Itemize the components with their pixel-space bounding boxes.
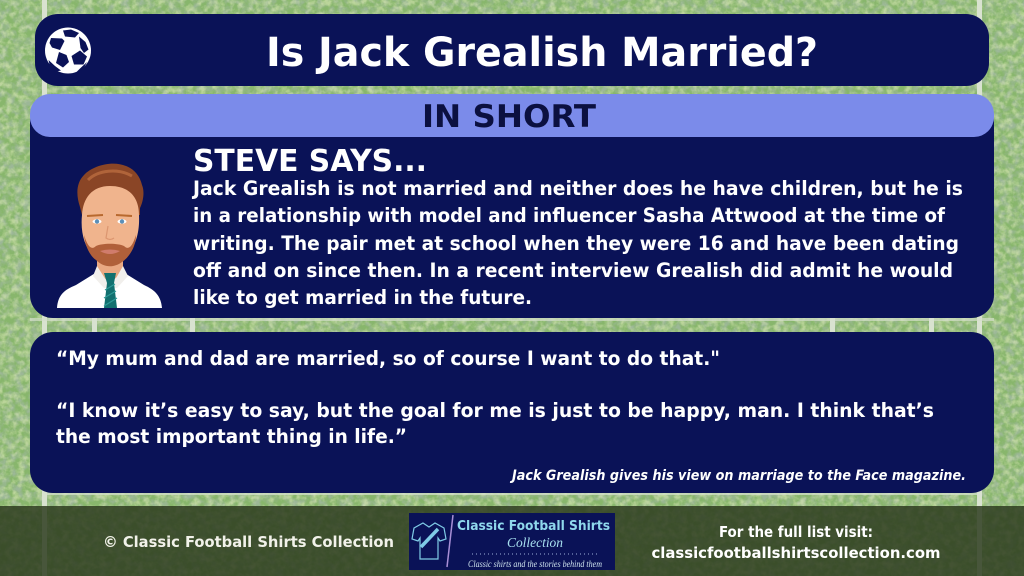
logo: Classic shirts and the stories behind them (468, 559, 602, 569)
text block: quote: “I know it’s easy to say, but the goal for me is just to be happy, man. I think that’s (56, 399, 934, 422)
logo: Collection (507, 536, 563, 551)
title text: Is Jack Grealish Married? (266, 30, 818, 76)
caption: quote source: Jack Grealish gives his view on marriage to the Face magazine. (509, 468, 966, 484)
icon: shirt (412, 523, 446, 559)
heading bar: in short (30, 94, 994, 137)
icon: football (45, 28, 91, 74)
text block: summary: like to get married in the future. (193, 286, 532, 309)
text block: summary (192, 177, 963, 309)
copyright text: © Classic Football Shirts Collection (103, 533, 394, 551)
text block: quote: the most important thing in life.” (56, 425, 407, 448)
text block: summary: off and on since then. In a recent interview Grealish did admit he would (193, 259, 953, 282)
footer bar (0, 506, 1024, 576)
text block: summary: Jack Grealish is not married and neither does he have children, but he is (192, 177, 963, 200)
text block: summary: writing. The pair met at school when they were 16 and have been dating (193, 232, 959, 255)
text block: quote (56, 347, 934, 448)
panel: quote (30, 332, 994, 493)
heading bar: in short: IN SHORT (422, 99, 596, 135)
illustration: Steve portrait (57, 164, 162, 308)
text block: summary: in a relationship with model and influencer Sasha Attwood at the time of (193, 204, 945, 227)
logo: Classic Football Shirts (457, 519, 610, 534)
panel: in short / Steve says (30, 94, 994, 318)
title banner (35, 14, 989, 86)
text block: quote: “My mum and dad are married, so of course I want to do that." (56, 347, 720, 370)
website call to action: classicfootballshirtscollection.com (652, 544, 940, 562)
logo (409, 513, 615, 570)
heading: Steve says: STEVE SAYS... (193, 144, 427, 179)
website call to action (652, 523, 940, 562)
website call to action: For the full list visit: (719, 523, 873, 541)
